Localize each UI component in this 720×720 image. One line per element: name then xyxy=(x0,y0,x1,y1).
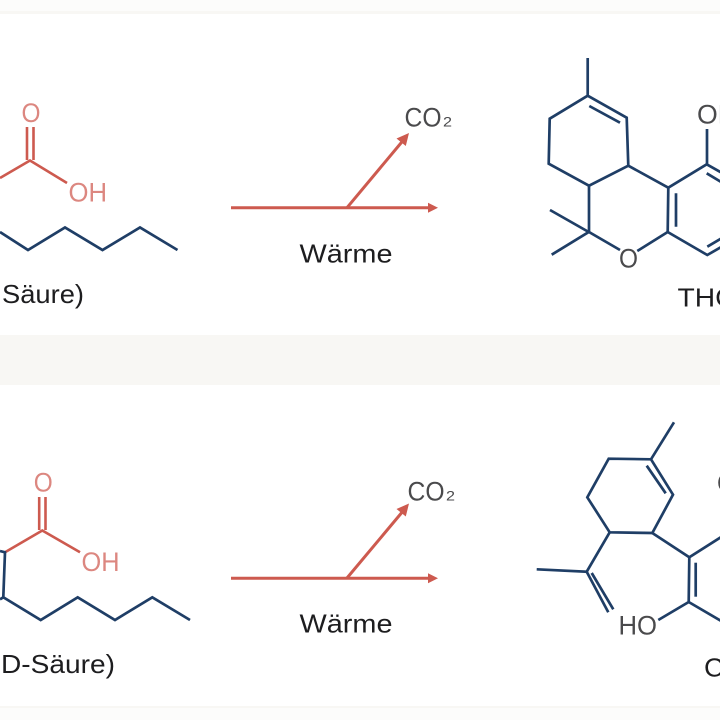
molecule: THC acid fragment xyxy=(0,98,178,250)
arrow: heat reaction with CO2 release: 2 xyxy=(446,488,455,504)
molecule: THC xyxy=(549,58,720,274)
molecule: THC acid fragment: OH xyxy=(68,178,107,208)
molecule: THC acid fragment: O xyxy=(22,98,40,128)
molecule: CBD xyxy=(537,422,720,640)
arrow: heat reaction with CO2 release: 2 xyxy=(443,114,452,130)
molecule: CBD: HO xyxy=(618,610,657,640)
label: THC acid: Säure) xyxy=(2,279,84,309)
arrow: heat reaction with CO2 release: CO xyxy=(404,102,442,132)
label: CBD acid: D-Säure) xyxy=(1,649,115,679)
molecule: CBD acid fragment: OH xyxy=(82,547,120,577)
arrow: heat reaction with CO2 release xyxy=(231,102,452,268)
molecule: THC: O xyxy=(619,244,638,274)
arrow: heat reaction with CO2 release: Wärme xyxy=(300,608,392,638)
panel: CBD-Säure to CBD xyxy=(0,385,720,706)
molecule: CBD acid fragment: O xyxy=(34,468,53,498)
arrow: heat reaction with CO2 release: CO xyxy=(408,476,444,506)
panel: THC-Säure to THC xyxy=(0,14,720,335)
arrow: heat reaction with CO2 release: Wärme xyxy=(300,238,392,268)
molecule: CBD acid fragment xyxy=(0,468,190,620)
arrow: heat reaction with CO2 release xyxy=(231,476,455,638)
